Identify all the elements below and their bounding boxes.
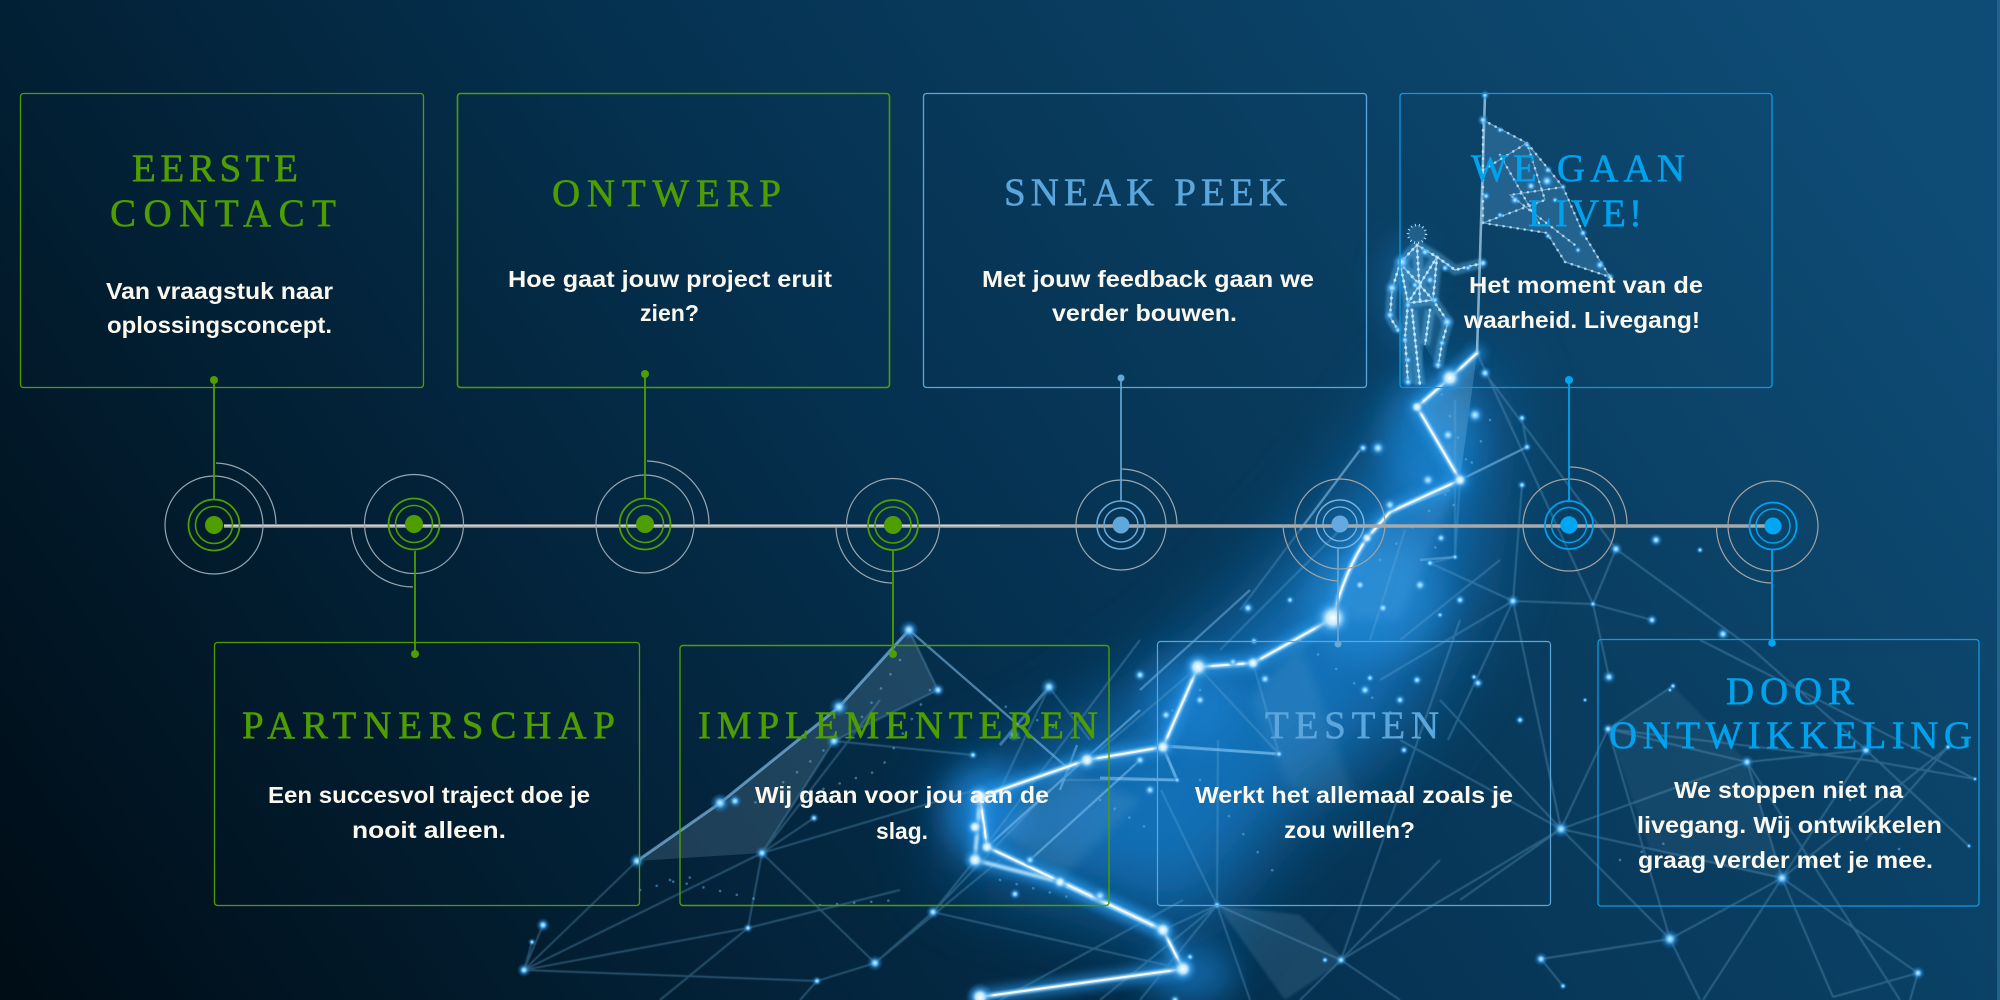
heading: PARTNERSCHAP bbox=[242, 704, 615, 747]
description: Wij gaan voor jou aan de bbox=[755, 782, 1049, 808]
heading: EERSTE bbox=[132, 147, 298, 190]
heading: WE GAAN bbox=[1471, 147, 1685, 190]
node 2: Partnerschap bbox=[351, 474, 464, 658]
heading: IMPLEMENTEREN bbox=[698, 704, 1098, 747]
panel: We gaan live bbox=[1400, 94, 1772, 388]
panel: Door ontwikkeling bbox=[1598, 640, 1979, 906]
heading: ONTWIKKELING bbox=[1609, 714, 1972, 757]
description: zien? bbox=[640, 300, 699, 326]
panel: Testen bbox=[1158, 642, 1550, 906]
node 5: Sneak peek bbox=[1076, 374, 1177, 570]
node 1: Eerste contact bbox=[165, 376, 276, 574]
mountain facets bbox=[637, 353, 1782, 1000]
heading: CONTACT bbox=[110, 192, 336, 235]
description: livegang. Wij ontwikkelen bbox=[1637, 812, 1942, 838]
node 8: Door ontwikkeling bbox=[1716, 481, 1818, 647]
timeline axis bbox=[224, 524, 1773, 528]
description: slag. bbox=[876, 818, 928, 844]
illustration: glowing network mountain with climber and flag bbox=[517, 90, 1978, 1000]
description: Met jouw feedback gaan we bbox=[982, 266, 1314, 292]
node 3: Ontwerp bbox=[596, 370, 709, 573]
description: Werkt het allemaal zoals je bbox=[1195, 782, 1513, 808]
mountain glow bbox=[945, 235, 1490, 1000]
description: nooit alleen. bbox=[352, 817, 506, 843]
panel: Implementeren bbox=[680, 646, 1109, 906]
heading: LIVE! bbox=[1528, 192, 1642, 235]
flag on pole bbox=[1477, 90, 1615, 353]
network lines bbox=[524, 353, 1975, 1000]
left ridge and bright side lines bbox=[637, 447, 1527, 861]
node 7: We gaan live bbox=[1523, 376, 1627, 571]
star dust bbox=[640, 390, 1930, 905]
node 4: Implementeren bbox=[836, 478, 940, 658]
description: Van vraagstuk naar bbox=[106, 278, 333, 304]
figure body mass bbox=[1400, 247, 1445, 385]
panel: Partnerschap bbox=[214, 642, 640, 906]
heading: TESTEN bbox=[1265, 704, 1439, 747]
description: Het moment van de bbox=[1469, 272, 1703, 298]
panel: Ontwerp bbox=[458, 94, 890, 388]
panel: Eerste contact bbox=[20, 94, 424, 388]
node 6: Testen bbox=[1283, 479, 1385, 648]
description: Hoe gaat jouw project eruit bbox=[508, 266, 832, 292]
description: zou willen? bbox=[1284, 817, 1415, 843]
heading: SNEAK PEEK bbox=[1004, 171, 1287, 214]
description: Een succesvol traject doe je bbox=[268, 782, 590, 808]
glowing route bbox=[975, 353, 1477, 997]
description: verder bouwen. bbox=[1052, 300, 1237, 326]
panel: Sneak peek bbox=[924, 94, 1366, 388]
network points bbox=[517, 366, 1978, 1000]
heading: ONTWERP bbox=[552, 172, 781, 215]
description: graag verder met je mee. bbox=[1638, 847, 1933, 873]
climber figure bbox=[1384, 225, 1489, 388]
heading: DOOR bbox=[1726, 670, 1854, 713]
description: oplossingsconcept. bbox=[107, 312, 332, 338]
route bright nodes bbox=[963, 363, 1470, 1000]
description: We stoppen niet na bbox=[1674, 777, 1903, 803]
figure joints bbox=[1384, 246, 1489, 388]
description: waarheid. Livegang! bbox=[1463, 307, 1700, 333]
